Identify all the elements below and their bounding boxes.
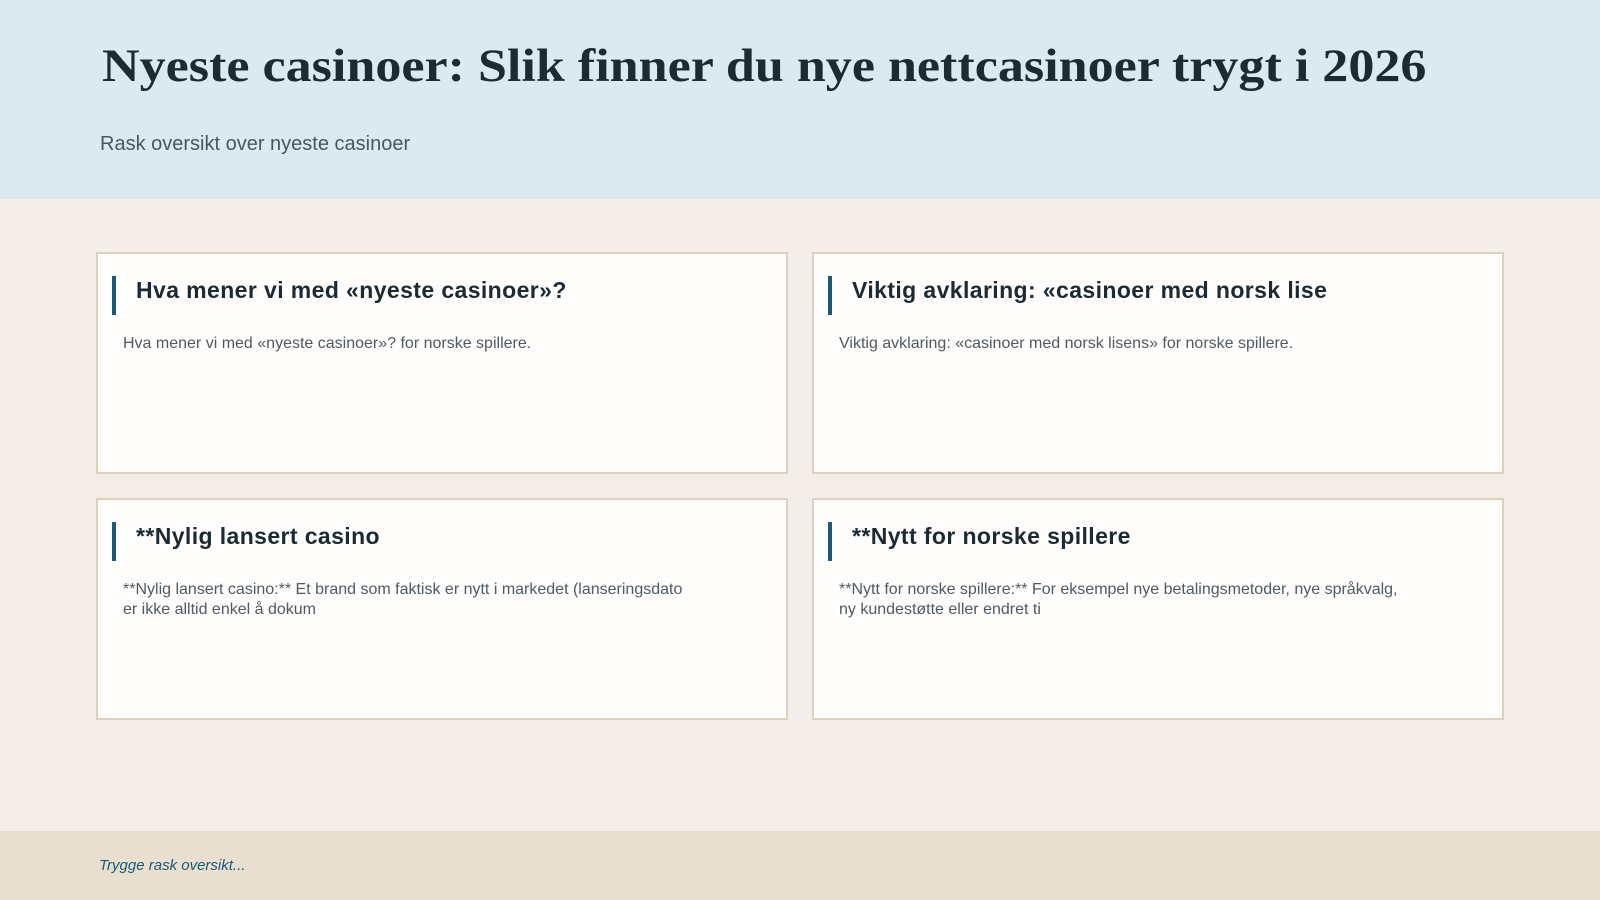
heading: Viktig avklaring: «casinoer med norsk lise [852, 277, 1327, 303]
accent bar [828, 522, 832, 561]
text: **Nylig lansert casino:** Et brand som faktisk er nytt i markedet (lanseringsdato [123, 581, 682, 598]
text [123, 581, 682, 618]
panel: norsk lisens [812, 252, 1504, 474]
accent bar [112, 522, 116, 561]
footer text: Trygge rask oversikt... [99, 857, 245, 874]
heading: Hva mener vi med «nyeste casinoer»? [136, 277, 567, 303]
text: **Nytt for norske spillere:** For eksempel nye betalingsmetoder, nye språkvalg, [839, 581, 1397, 598]
accent bar [112, 276, 116, 315]
panel: nylig lansert [96, 498, 788, 720]
panel: nyeste casinoer [96, 252, 788, 474]
text: Viktig avklaring: «casinoer med norsk lisens» for norske spillere. [839, 335, 1293, 352]
accent bar [828, 276, 832, 315]
text: Hva mener vi med «nyeste casinoer»? for norske spillere. [123, 335, 531, 352]
text: er ikke alltid enkel å dokum [123, 601, 316, 618]
text [839, 581, 1397, 618]
heading: **Nylig lansert casino [136, 523, 380, 549]
text: ny kundestøtte eller endret ti [839, 601, 1041, 618]
title: Nyeste casinoer: Slik finner du nye nettcasinoer trygt i 2026 [102, 40, 1426, 92]
panel: nytt for norske spillere [812, 498, 1504, 720]
header band [0, 0, 1600, 199]
footer band [0, 831, 1600, 900]
subtitle: Rask oversikt over nyeste casinoer [100, 133, 410, 155]
heading: **Nytt for norske spillere [852, 523, 1131, 549]
